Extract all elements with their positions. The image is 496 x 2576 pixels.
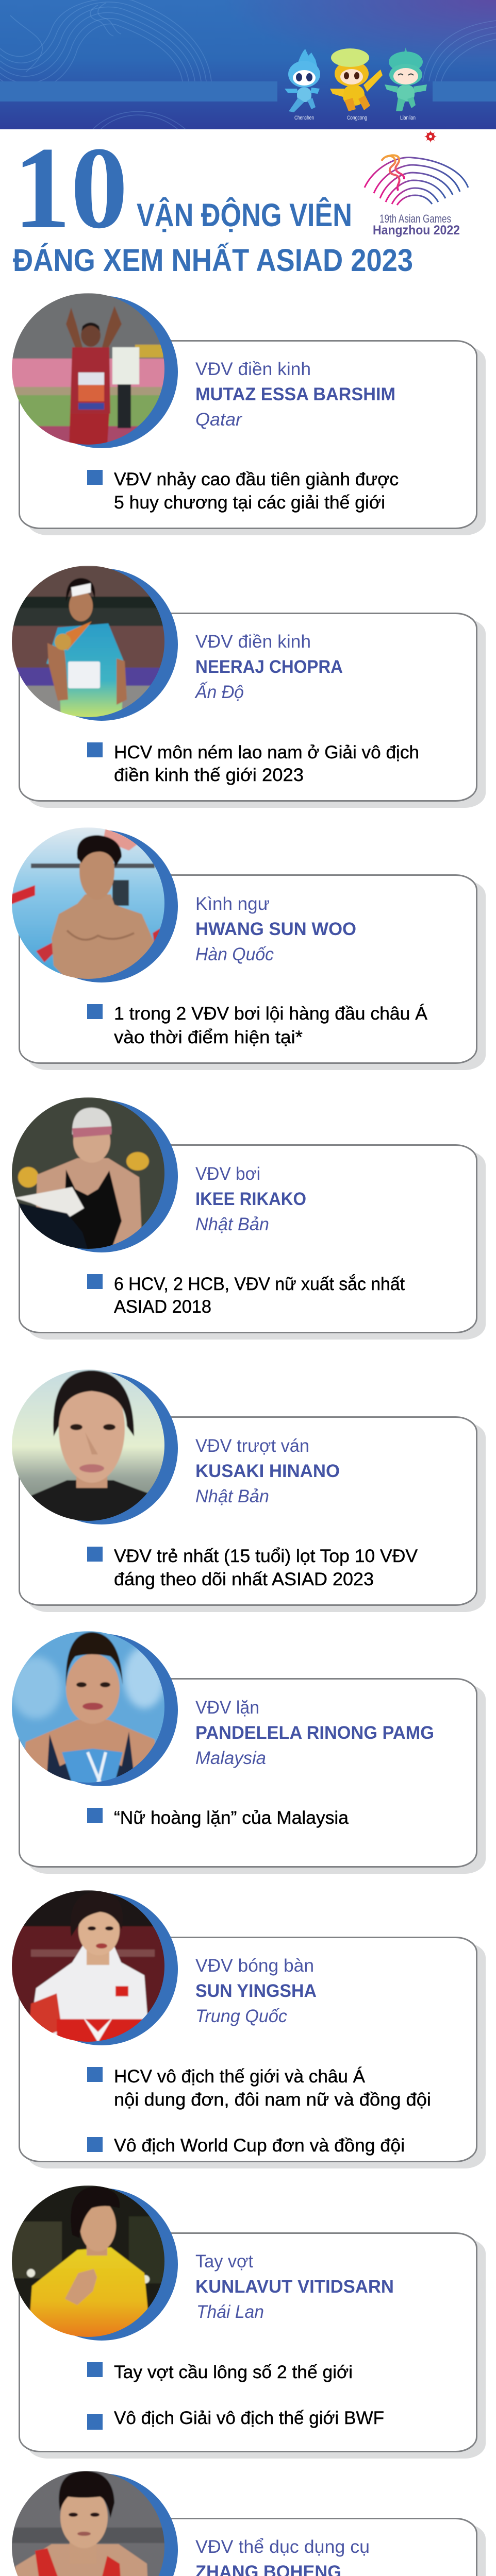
title line 1: VẬN ĐỘNG VIÊN xyxy=(137,197,352,233)
role: Kình ngư xyxy=(195,894,270,914)
card xyxy=(20,341,486,535)
country: Ấn Độ xyxy=(194,682,244,702)
mascots xyxy=(285,47,427,121)
role: Tay vợt xyxy=(195,2251,253,2272)
name: SUN YINGSHA xyxy=(195,1981,317,2001)
bullet 2 xyxy=(87,2137,103,2152)
card xyxy=(20,1937,486,2168)
achievement text: 5 huy chương tại các giải thế giới xyxy=(114,493,385,513)
panel: Neeraj Chopra xyxy=(0,566,486,808)
achievement text 1 xyxy=(114,2066,431,2110)
photo: Zhang xyxy=(0,2471,178,2576)
mascot names: Lianlian xyxy=(400,115,416,121)
card xyxy=(20,1679,486,1874)
bullet 1 xyxy=(87,2067,103,2082)
photo: Pandelela xyxy=(0,1631,178,1786)
name: KUNLAVUT VITIDSARN xyxy=(195,2277,394,2297)
achievement text xyxy=(114,469,399,513)
bullet xyxy=(87,1004,103,1019)
bullet 2 xyxy=(87,2414,103,2430)
name: NEERAJ CHOPRA xyxy=(195,657,343,677)
achievement text xyxy=(114,742,419,785)
card xyxy=(20,1145,486,1340)
bullet xyxy=(87,1274,103,1289)
card xyxy=(20,1417,486,1612)
panel: Zhang Boheng xyxy=(0,2471,486,2576)
achievement text: 6 HCV, 2 HCB, VĐV nữ xuất sắc nhất xyxy=(114,1274,405,1294)
panel: Kusaki Hinano xyxy=(0,1369,486,1612)
photo: Sun xyxy=(0,1890,178,2045)
role: VĐV thể dục dụng cụ xyxy=(195,2537,370,2557)
photo: Barshim xyxy=(0,293,178,448)
achievement text: HCV môn ném lao nam ở Giải vô địch xyxy=(114,742,419,762)
bullet 1 xyxy=(87,2362,103,2377)
photo: Kusaki xyxy=(0,1369,178,1524)
mascot: Lianlian xyxy=(385,47,427,111)
title xyxy=(13,123,413,278)
logo: Hangzhou 2022 Asian Games: Hangzhou 2022 xyxy=(373,223,460,238)
role: VĐV bóng bàn xyxy=(195,1956,314,1976)
panel: Pandelela Rinong Pamg xyxy=(0,1631,486,1874)
icon: red sun xyxy=(424,130,437,143)
photo: Ikee xyxy=(0,1097,178,1252)
country: Hàn Quốc xyxy=(195,944,274,964)
achievement text xyxy=(114,1274,405,1317)
card xyxy=(20,2518,486,2576)
card xyxy=(20,875,486,1070)
name: PANDELELA RINONG PAMG xyxy=(195,1723,434,1743)
mascot: Chenchen xyxy=(285,49,320,112)
bullet xyxy=(87,1808,103,1823)
name: KUSAKI HINANO xyxy=(195,1461,340,1481)
achievement text: vào thời điểm hiện tại* xyxy=(114,1027,303,1047)
mascot names: Chenchen xyxy=(294,115,314,121)
achievement text: ASIAD 2018 xyxy=(114,1297,211,1317)
achievement text 2: Vô địch Giải vô địch thế giới BWF xyxy=(114,2408,384,2428)
name: HWANG SUN WOO xyxy=(195,919,356,939)
panel: Mutaz Essa Barshim xyxy=(0,293,486,535)
photo: Hwang xyxy=(0,827,178,982)
role: VĐV điền kinh xyxy=(195,359,311,379)
country: Nhật Bản xyxy=(195,1214,269,1234)
country: Trung Quốc xyxy=(195,2006,287,2026)
role: VĐV trượt ván xyxy=(195,1436,309,1456)
achievement text: đáng theo dõi nhất ASIAD 2023 xyxy=(114,1569,374,1589)
bullet xyxy=(87,742,103,757)
name: MUTAZ ESSA BARSHIM xyxy=(195,384,395,404)
photo: Kunlavut xyxy=(0,2185,178,2341)
photo: Chopra xyxy=(0,566,178,722)
achievement text: điền kinh thế giới 2023 xyxy=(114,765,304,785)
header banner xyxy=(0,0,496,129)
achievement text 1: Tay vợt cầu lông số 2 thế giới xyxy=(114,2362,353,2382)
title number 10: 10 xyxy=(13,123,128,253)
panel: Kunlavut Vitidsarn xyxy=(0,2185,486,2459)
title line 2: ĐÁNG XEM NHẤT ASIAD 2023 xyxy=(13,243,413,278)
role: VĐV bơi xyxy=(195,1164,260,1184)
country: Nhật Bản xyxy=(195,1486,269,1506)
mascot names: Congcong xyxy=(347,115,367,121)
country: Thái Lan xyxy=(196,2302,264,2322)
achievement text: “Nữ hoàng lặn” của Malaysia xyxy=(114,1808,349,1828)
country: Malaysia xyxy=(195,1748,266,1768)
mascot names xyxy=(294,115,416,121)
bullet xyxy=(87,1547,103,1562)
mascot: Congcong xyxy=(330,48,383,111)
logo: Hangzhou 2022 Asian Games xyxy=(365,130,468,238)
logo caption: 19th Asian Games xyxy=(379,212,451,225)
achievement text: 1 trong 2 VĐV bơi lội hàng đầu châu Á xyxy=(114,1004,428,1024)
achievement text xyxy=(114,1004,428,1047)
panel: Ikee Rikako xyxy=(0,1097,486,1340)
panel: Hwang Sun Woo xyxy=(0,827,486,1070)
role: VĐV lặn xyxy=(195,1698,259,1718)
achievement text 1: HCV vô địch thế giới và châu Á xyxy=(114,2066,366,2087)
country: Qatar xyxy=(195,410,242,430)
achievement text xyxy=(114,1546,418,1589)
bullet xyxy=(87,470,103,485)
name: IKEE RIKAKO xyxy=(195,1189,306,1209)
achievement text 2: Vô địch World Cup đơn và đồng đội xyxy=(114,2136,405,2156)
card xyxy=(20,2233,486,2459)
achievement text 1: nội dung đơn, đôi nam nữ và đồng đội xyxy=(114,2090,431,2110)
role: VĐV điền kinh xyxy=(195,632,311,652)
achievement text: VĐV nhảy cao đầu tiên giành được xyxy=(114,469,399,489)
achievement text: VĐV trẻ nhất (15 tuổi) lọt Top 10 VĐV xyxy=(114,1546,418,1566)
card xyxy=(20,613,486,808)
panel: Sun Yingsha xyxy=(0,1890,486,2168)
